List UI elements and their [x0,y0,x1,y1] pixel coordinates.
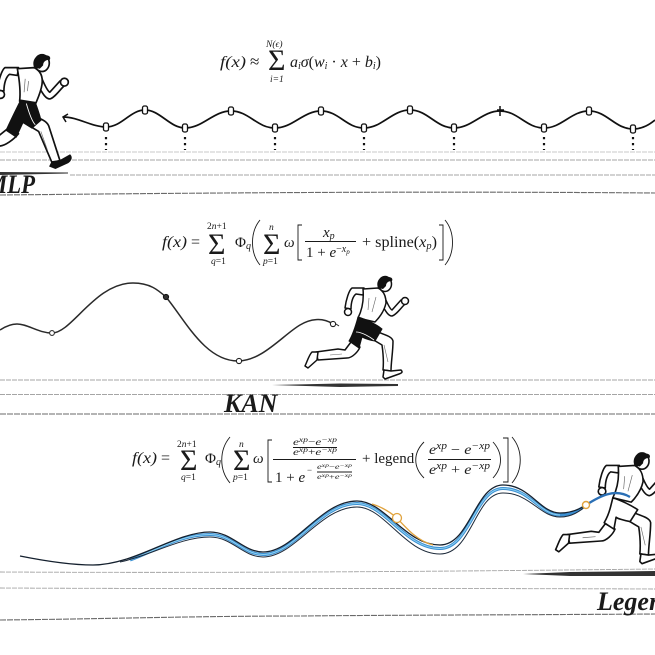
formula: KAN [162,220,452,267]
formula: Legend: = [161,450,170,467]
formula: MLP: ) [376,54,381,71]
formula: MLP: x + b [341,54,373,71]
panel: MLP [0,39,655,199]
formula: Legend: −xp [321,436,338,444]
ground shadow: Legend [523,571,655,576]
formula: MLP: i [325,61,328,72]
formula: Legend: p=1 [232,473,248,483]
formula: Legend: e [464,463,470,478]
formula: KAN: q [246,241,251,252]
formula: Legend: e [315,438,320,448]
formula: Legend: − [307,465,312,475]
formula: KAN: Φ [235,235,246,251]
formula: Legend: e [317,462,320,471]
track lines: KAN [0,380,655,414]
formula: Legend: e [429,443,435,458]
wave: KAN spline function [0,283,339,364]
formula: Legend: + [329,472,335,481]
ground shadow: MLP [0,172,68,175]
formula: Legend: Σ [233,444,250,477]
formula: Legend: e [429,463,435,478]
formula: KAN: f(x) [162,234,187,251]
formula: Legend: + [447,463,464,478]
formula: KAN: x [341,244,347,255]
formula: KAN: = [191,234,200,251]
formula: Legend: −xp [340,463,352,469]
formula: Legend: xp [320,463,329,469]
formula: KAN: p [425,241,432,252]
formula: Legend: e [317,472,320,481]
formula: KAN: 1 + e [306,245,336,261]
label: KAN: KAN [223,389,279,418]
formula: Legend: ω [253,451,264,467]
formula: MLP: · [327,54,341,71]
formula: Legend: 2n+1 [177,440,197,450]
formula: Legend: 1 + e [275,470,305,486]
formula: MLP: i [373,61,376,72]
formula: Legend: + [308,448,315,458]
formula: KAN: x [323,225,330,241]
formula: Legend: −xp [471,461,490,472]
formula: KAN: n [269,223,274,233]
formula: MLP: N(ϵ) [265,39,282,50]
formula: MLP: Σ [268,44,285,77]
formula: Legend: −xp [340,473,352,479]
runner: MLP [0,55,71,168]
formula: KAN: 2n+1 [207,222,227,232]
panel: KAN [0,220,655,418]
formula: Legend: e [464,443,470,458]
track lines: Legend [0,569,655,620]
formula: KAN: p [345,248,350,256]
dotted node connectors: MLP [106,137,633,150]
formula: Legend: q [216,457,221,468]
formula: KAN: − [336,244,342,255]
formula: Legend: f(x) [132,450,157,467]
formula: KAN: ) [432,234,437,251]
formula: Legend [132,436,520,486]
formula: Legend: Φ [205,451,216,467]
runner: Legend [556,453,655,564]
formula: Legend: + legend [362,451,415,467]
formula: Legend: xp [297,446,309,454]
formula: Legend: − [329,462,335,471]
formula: Legend: xp [320,473,329,479]
formula: Legend: − [308,438,315,448]
formula: MLP: f(x) [220,54,246,71]
formula: Legend: e [335,472,338,481]
ground shadow: KAN [272,384,398,387]
runner: KAN [305,276,408,379]
formula: Legend: q=1 [181,473,196,483]
formula: KAN: Σ [263,228,280,261]
formula: Legend: −xp [321,446,338,454]
formula: Legend: xp [297,436,309,444]
formula: KAN: Σ [208,228,225,261]
formula: Legend: e [335,462,338,471]
wave: MLP network function [63,106,655,133]
formula: Legend: e [293,448,297,458]
formula: KAN: ω [284,235,295,251]
formula: Legend: xp [435,461,447,472]
formula: KAN: p [329,231,335,242]
formula: MLP: a [290,54,298,71]
track lines: MLP [0,152,655,195]
formula: Legend: Σ [180,444,197,477]
formula: Legend: e [315,448,320,458]
panel: Legend [0,436,655,620]
formula: Legend: e [293,438,297,448]
formula: MLP [220,39,381,85]
formula: KAN: q=1 [211,257,226,267]
formula: Legend: − [447,443,464,458]
formula: Legend: xp [435,441,447,452]
formula: MLP: ≈ [250,52,259,71]
formula: Legend: −xp [471,441,490,452]
formula: MLP: i=1 [270,75,284,85]
formula: Legend: n [239,440,244,450]
formula: KAN: + spline(x [362,234,426,251]
formula: KAN: p=1 [262,257,278,267]
formula: MLP: (w [309,54,325,71]
formula: MLP: i [298,61,301,72]
wave: Legend function with blue band [20,485,630,565]
formula: MLP: σ [301,54,310,71]
